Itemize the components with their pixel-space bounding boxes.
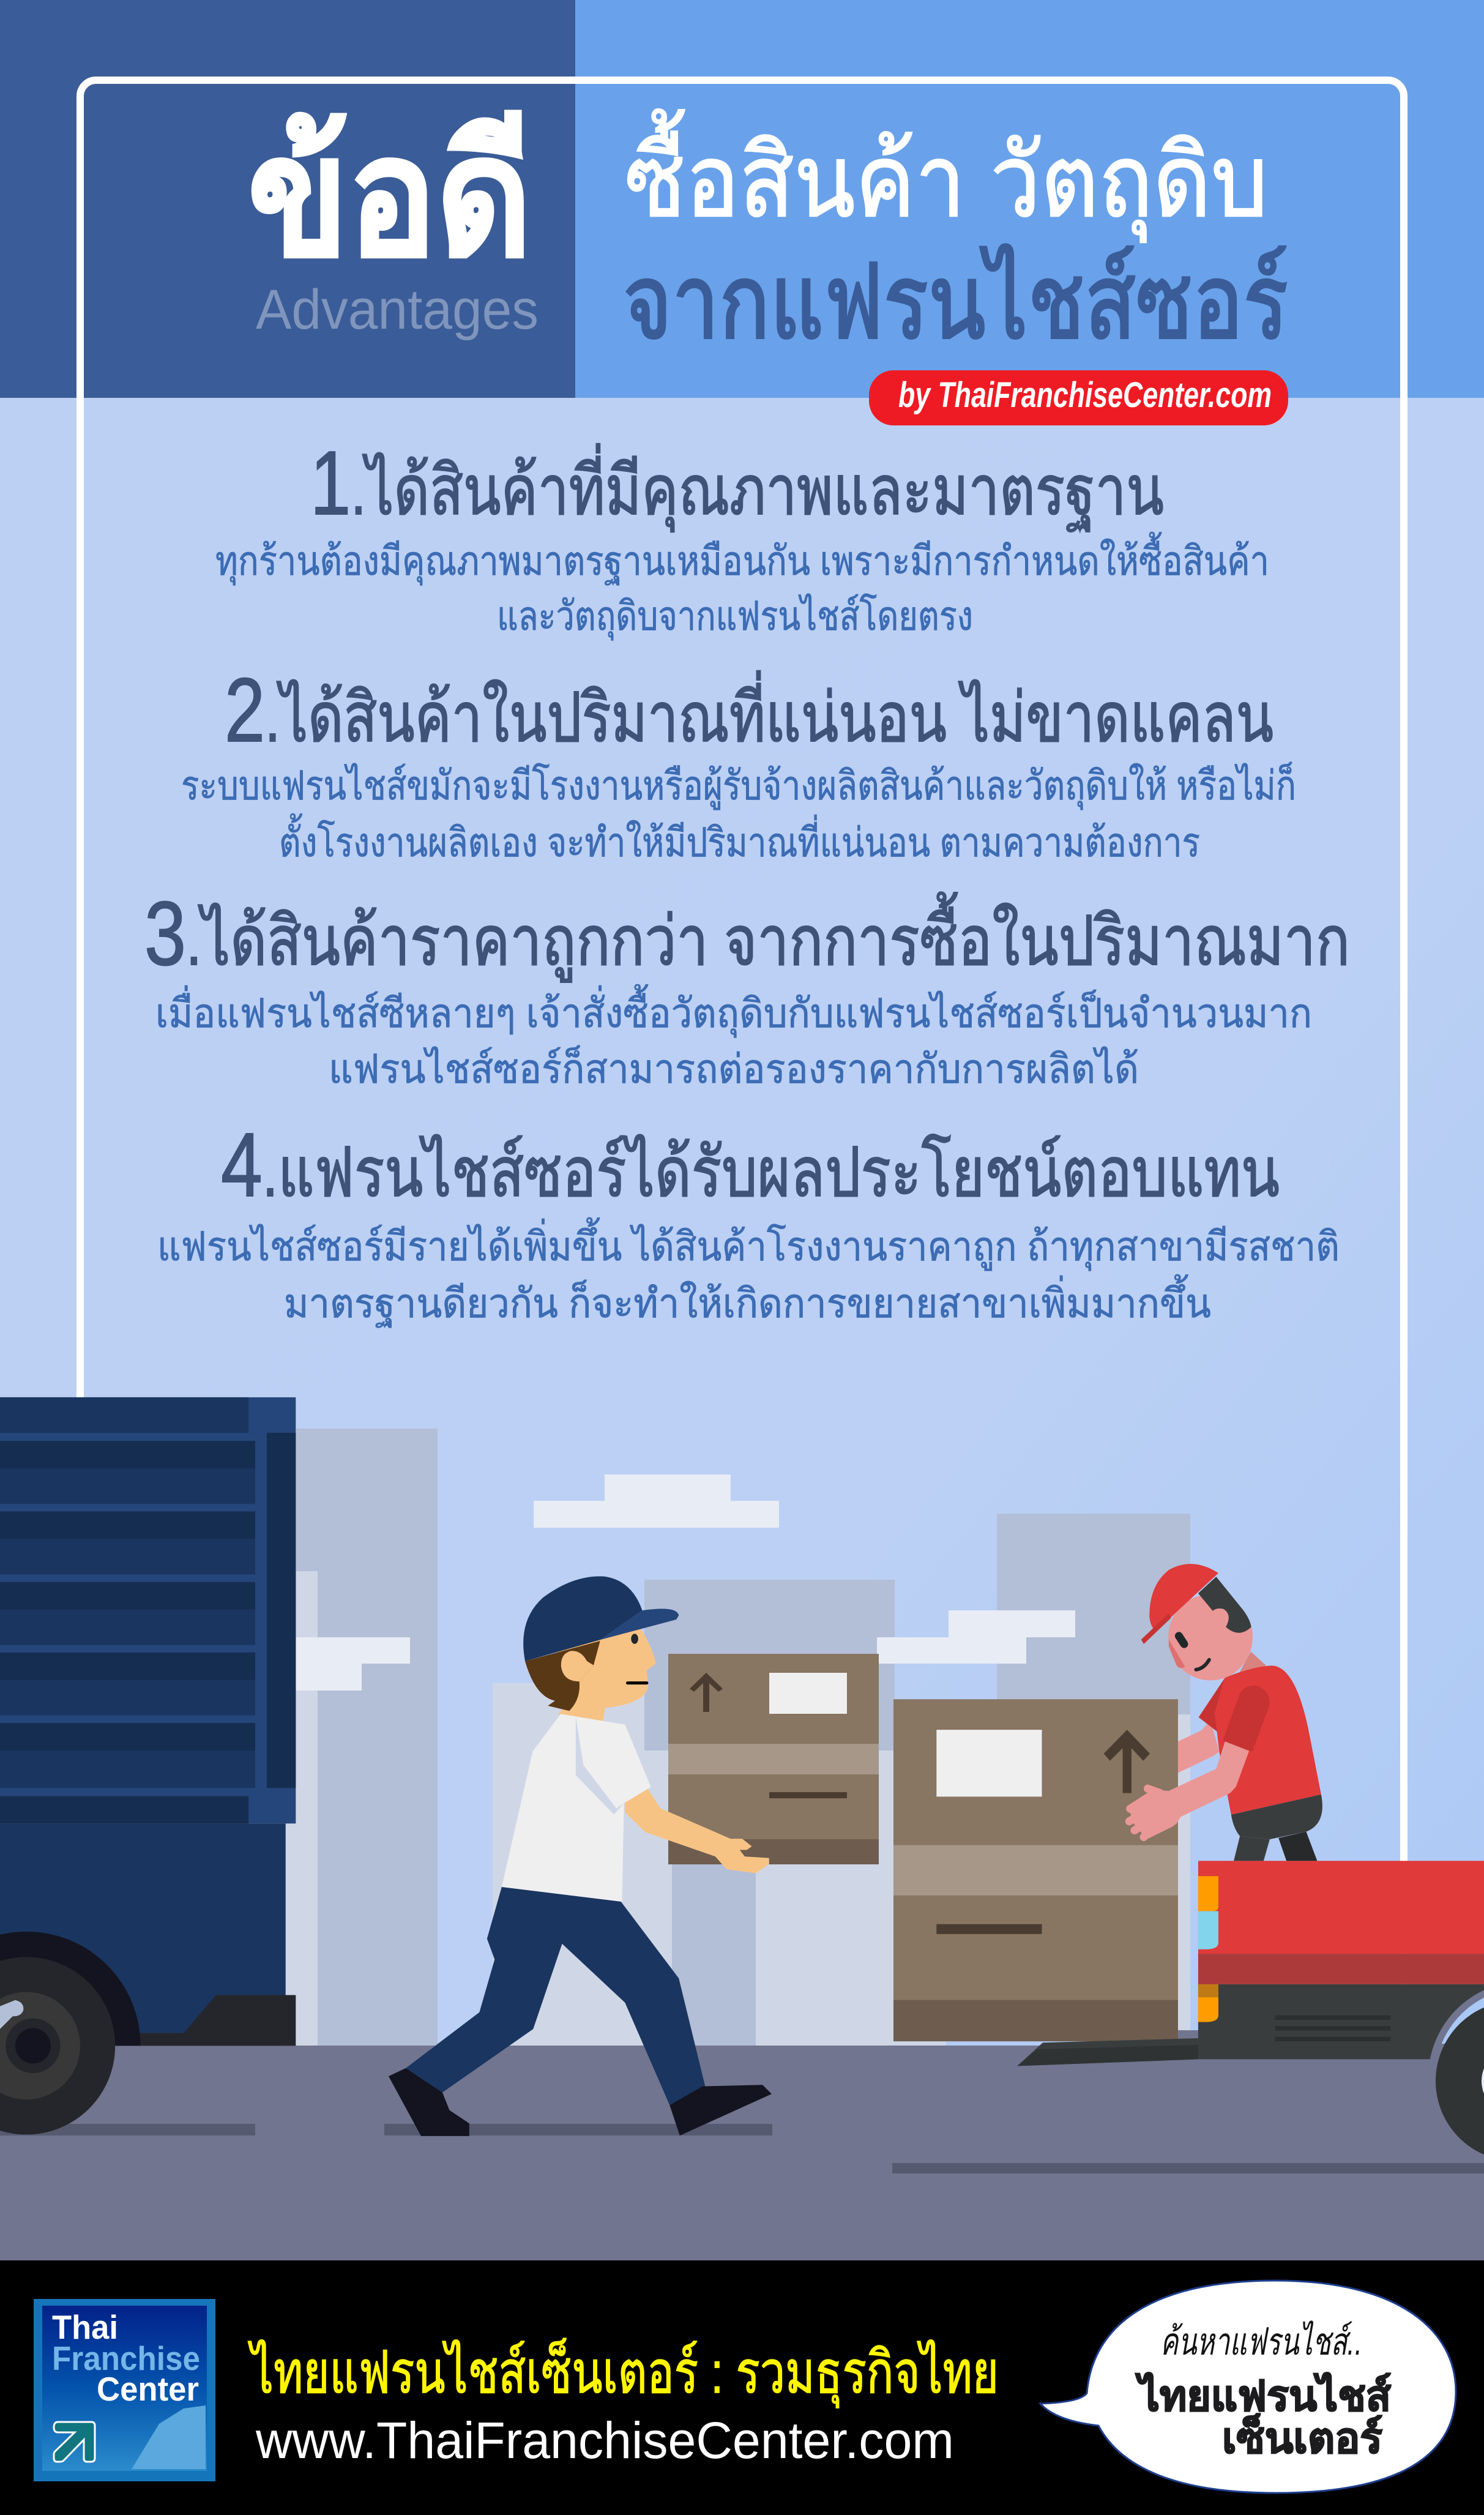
footer band: [0, 2260, 1484, 2515]
advantage 3: [144, 883, 1350, 1091]
clouds: [296, 1474, 1075, 1691]
logo: [34, 2299, 215, 2481]
shoes: [389, 2068, 772, 2136]
neck: [1239, 1651, 1266, 1673]
advantage 4: [157, 1115, 1340, 1328]
footer url: www.ThaiFranchiseCenter.com: [255, 2412, 954, 2469]
header panel: [0, 0, 1484, 398]
advantage 1: [215, 433, 1269, 641]
eye: [1179, 1636, 1184, 1644]
back arm: [1178, 1721, 1219, 1773]
advantage 1: และวัตถุดิบจากแฟรนไชส์โดยตรง: [497, 593, 973, 641]
man carrying box: [389, 1576, 772, 2136]
shirt: [502, 1714, 651, 1902]
blue delivery truck: [0, 1397, 296, 2134]
worker with red cap: [1129, 1564, 1322, 1861]
logo: Franchise: [52, 2339, 200, 2377]
advantage 2: [181, 660, 1296, 865]
head: [1168, 1594, 1253, 1680]
speech bubble: เซ็นเตอร์: [1222, 2413, 1382, 2462]
cap visor: [600, 1609, 679, 1640]
title line 2: จากแฟรนไชส์ซอร์: [623, 244, 1288, 361]
cap brim: [1141, 1613, 1171, 1644]
shirt fold: [576, 1717, 624, 1814]
white rounded frame: [80, 80, 1404, 2100]
credit pill: by ThaiFranchiseCenter.com: [898, 375, 1272, 415]
large cardboard box: [893, 1699, 1178, 2041]
advantage 2: ตั้งโรงงานผลิตเอง จะทำให้มีปริมาณที่แน่นอน ตามความต้องการ: [279, 813, 1200, 865]
eye: [631, 1634, 638, 1644]
advantage 3: เมื่อแฟรนไชส์ซีหลายๆ เจ้าสั่งซื้อวัตถุดิบกับแฟรนไชส์ซอร์เป็นจำนวนมาก: [155, 984, 1312, 1038]
red cap: [1149, 1564, 1218, 1631]
page background: [0, 398, 1484, 2260]
subtitle: Advantages: Advantages: [256, 278, 539, 341]
logo: Thai: [52, 2308, 118, 2346]
skyline buildings: [286, 1429, 1190, 2046]
footer slogan: ไทยแฟรนไชส์เซ็นเตอร์ : รวมธุรกิจไทย: [248, 2337, 999, 2408]
road: [0, 2030, 1484, 2260]
nose: [1169, 1640, 1185, 1668]
title line 1: ซื้อสินค้า วัตถุดิบ: [625, 109, 1268, 243]
back sleeve: [1199, 1678, 1225, 1732]
cap: [523, 1576, 643, 1661]
speech bubble: ไทยแฟรนไชส์: [1135, 2372, 1391, 2420]
smile: [1196, 1660, 1209, 1670]
hair: [1198, 1577, 1251, 1633]
face: [558, 1628, 656, 1712]
advantage 3: แฟรนไชส์ซอร์ก็สามารถต่อรองราคากับการผลิตได้: [329, 1045, 1139, 1091]
front sleeve: [1223, 1686, 1269, 1752]
hair: [525, 1641, 600, 1711]
advantage 1: 1.ได้สินค้าที่มีคุณภาพและมาตรฐาน: [310, 433, 1164, 534]
shirt: [1215, 1665, 1321, 1815]
speech bubble: ค้นหาแฟรนไชส์..: [1160, 2320, 1362, 2363]
neck: [558, 1699, 606, 1725]
trousers: [406, 1887, 705, 2105]
ear: [561, 1651, 594, 1681]
advantage 1: ทุกร้านต้องมีคุณภาพมาตรฐานเหมือนกัน เพราะมีการกำหนดให้ซื้อสินค้า: [215, 532, 1269, 586]
red truck: [1017, 1861, 1484, 2066]
speech bubble: [1040, 2281, 1456, 2493]
logo: Center: [97, 2370, 199, 2408]
front arm and hand: [1129, 1741, 1249, 1839]
advantage 2: 2.ได้สินค้าในปริมาณที่แน่นอน ไม่ขาดแคลน: [225, 660, 1273, 761]
legs: [1278, 1832, 1317, 1861]
advantage 4: แฟรนไชส์ซอร์มีรายได้เพิ่มขึ้น ได้สินค้าโรงงานราคาถูก ถ้าทุกสาขามีรสชาติ: [157, 1217, 1340, 1271]
credit pill: [869, 370, 1288, 425]
arm: [625, 1789, 769, 1874]
advantage 4: 4.แฟรนไชส์ซอร์ได้รับผลประโยชน์ตอบแทน: [221, 1115, 1280, 1216]
advantage 4: มาตรฐานดียวกัน ก็จะทำให้เกิดการขยายสาขาเพิ่มมากขึ้น: [284, 1274, 1211, 1328]
mouth: [626, 1681, 648, 1684]
title: ข้อดี: ข้อดี: [248, 104, 532, 290]
advantage 2: ระบบแฟรนไชส์ขมักจะมีโรงงานหรือผู้รับจ้างผลิตสินค้าและวัตถุดิบให้ หรือไม่ก็: [181, 761, 1296, 810]
small cardboard box: [668, 1654, 879, 1864]
truck wheel: [1430, 1990, 1484, 2154]
pants: [1231, 1795, 1322, 1839]
